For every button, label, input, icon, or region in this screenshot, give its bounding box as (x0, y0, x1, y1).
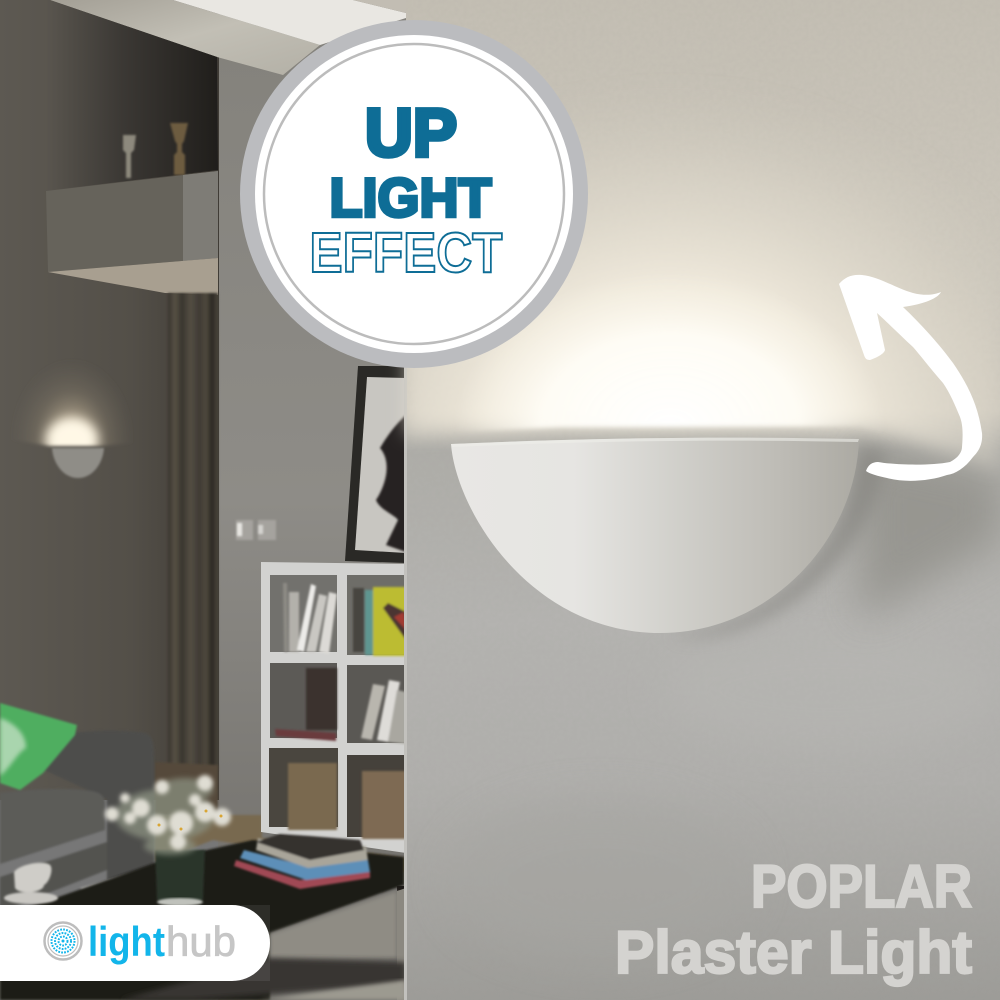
stack of books on table (234, 834, 370, 889)
lamp shadow on wall (670, 445, 885, 637)
ceiling beam (50, 0, 406, 75)
icon: half-round plaster wall lamp (451, 438, 859, 633)
floor (155, 762, 406, 872)
flower vase (105, 775, 231, 906)
text: Plaster Light: Plaster Light (615, 919, 972, 986)
shadow right of lamp (860, 445, 1000, 620)
wall shelf niche with trophies (45, 0, 218, 295)
sofa (0, 731, 154, 912)
trophies (123, 135, 136, 178)
product name (615, 853, 972, 986)
text: POPLAR: POPLAR (751, 853, 972, 920)
panel: room scene on left (0, 0, 408, 1000)
room walls (0, 0, 408, 1000)
badge: up light effect (240, 20, 588, 368)
bookcase (261, 562, 406, 853)
small wall lamp (52, 448, 104, 478)
panel: plaster wall on right (394, 0, 1000, 1000)
framed picture (345, 366, 406, 563)
cushion pattern (0, 718, 26, 776)
curtain (168, 293, 218, 770)
logo pill: lighthub (0, 905, 270, 981)
text: light: light (88, 918, 165, 965)
light edge of wall (404, 360, 407, 1000)
coffee table (0, 840, 406, 1000)
text: hub: hub (166, 918, 236, 965)
cup and saucer (4, 863, 58, 904)
plaster grain (406, 0, 1000, 1000)
heading: LIGHT: LIGHT (330, 166, 492, 228)
icon: lighthub logo mark (44, 922, 82, 960)
core of glow (478, 301, 862, 430)
green cushion (0, 703, 77, 790)
heading: EFFECT outlined: EFFECT (310, 221, 503, 285)
light switch (236, 520, 276, 540)
books (275, 583, 406, 839)
wall mottling (660, 630, 1000, 750)
arrow pointing up (839, 275, 982, 481)
light glow above lamp (394, 146, 1000, 469)
heading: UP: UP (365, 95, 457, 171)
